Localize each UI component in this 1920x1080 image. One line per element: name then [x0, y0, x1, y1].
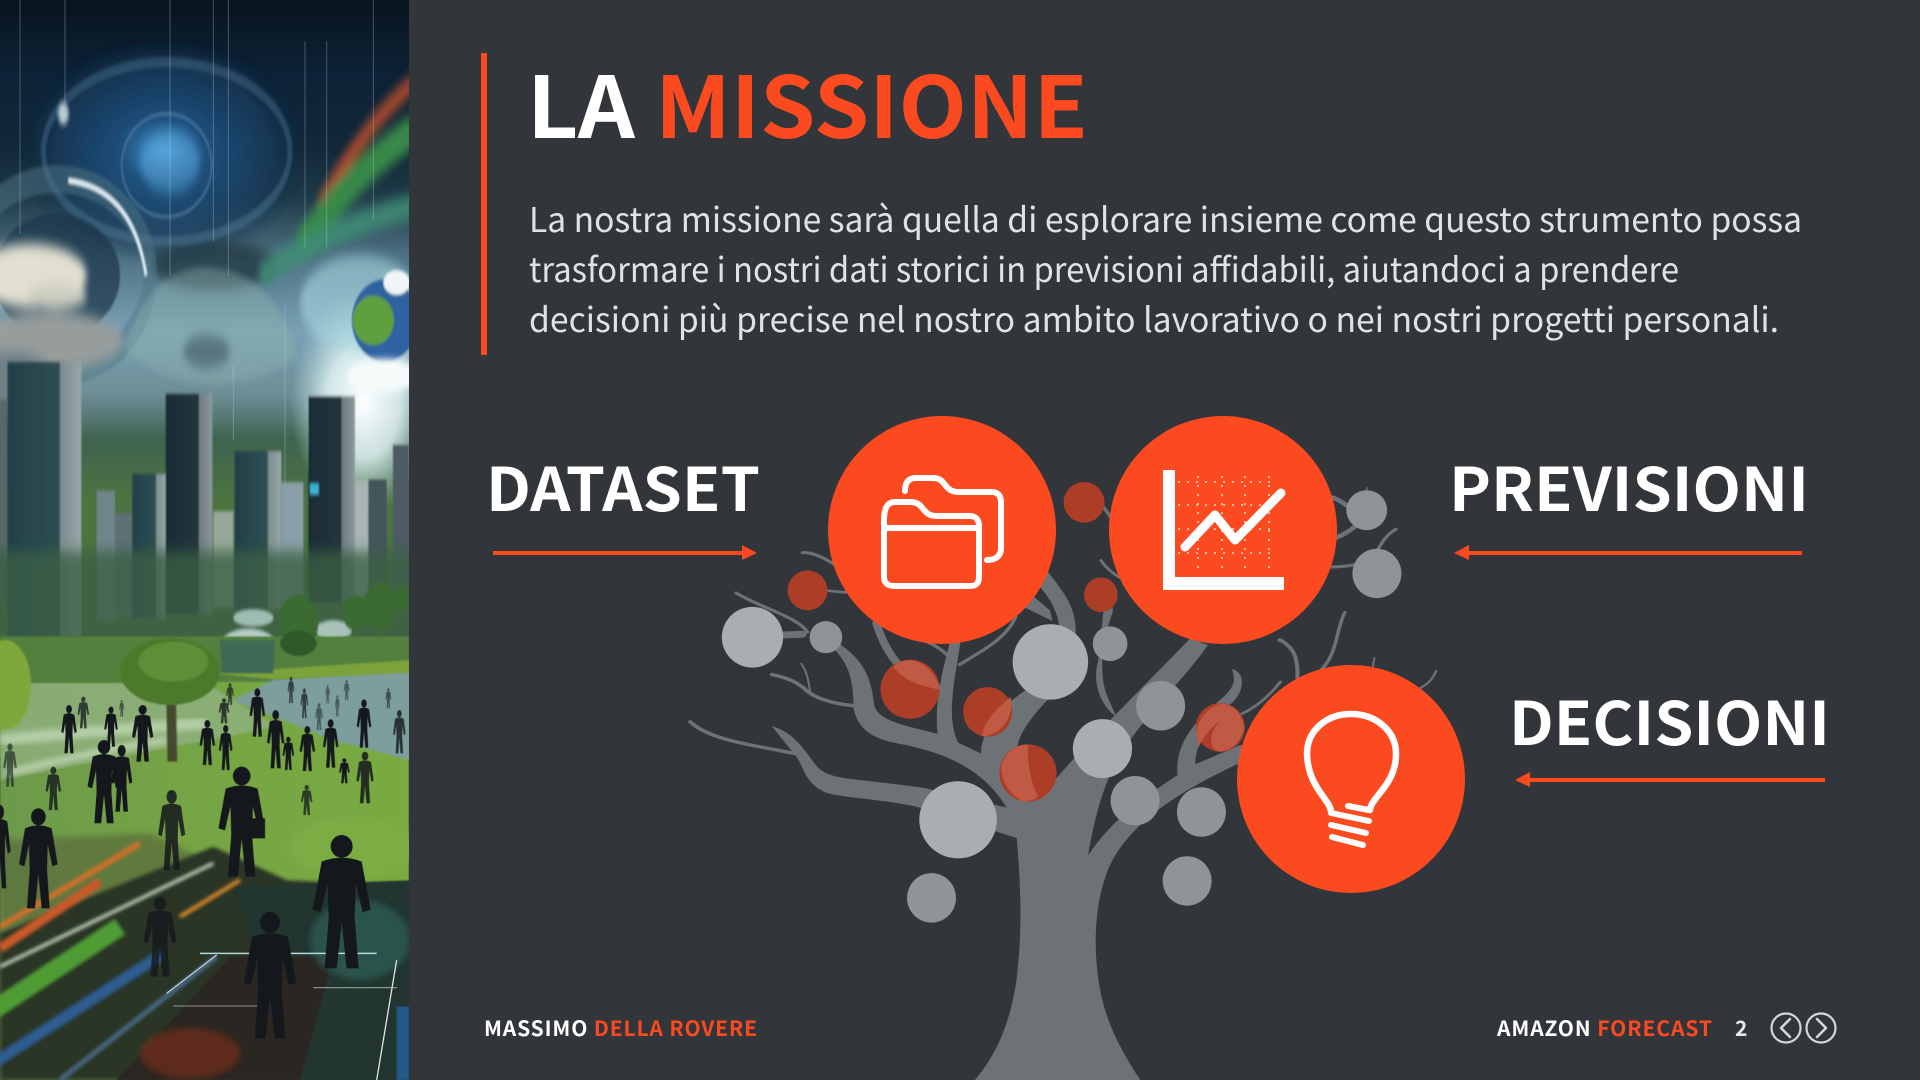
nav icon: next [1806, 1014, 1836, 1042]
clouds [0, 244, 123, 406]
nav icon: previous [1772, 1014, 1800, 1042]
rainbow streaks [260, 83, 413, 276]
icon circle: light bulb [1237, 665, 1465, 893]
title: LA MISSIONE [527, 40, 1088, 163]
bloom and earth [294, 310, 409, 504]
arrow: dataset [493, 545, 757, 560]
arrow: previsioni [1454, 545, 1802, 560]
body text [529, 193, 1802, 342]
dome [123, 267, 298, 384]
body text: La nostra missione sarà quella di esplorare insieme come questo strumento possa [529, 193, 1802, 242]
icon circle: growth chart [1109, 416, 1337, 644]
footer: course name: AMAZON FORECAST [1496, 1013, 1712, 1043]
fruit: mid grey balls [810, 490, 1401, 923]
tree trunk and branches [772, 571, 1246, 1080]
crowd silhouettes [0, 677, 406, 1038]
label: dataset: DATASET [486, 442, 760, 529]
tree illustration [690, 482, 1436, 1080]
icon circle: folders [828, 416, 1056, 644]
distant domes and trees [223, 626, 274, 638]
body text: trasformare i nostri dati storici in previsioni affidabili, aiutandoci a prendere [529, 243, 1679, 292]
skyline [0, 399, 7, 606]
accent bar [481, 53, 487, 355]
footer: author: MASSIMO DELLA ROVERE [484, 1013, 757, 1043]
footer: page number: 2 [1735, 1013, 1747, 1043]
label: previsioni: PREVISIONI [1449, 442, 1809, 529]
red ball branch overlays [893, 660, 1244, 801]
fruit: red balls [788, 482, 1245, 802]
label: decisioni: DECISIONI [1509, 676, 1830, 763]
panel: futuristic city photo [0, 0, 437, 1080]
arrow: decisioni [1515, 772, 1825, 787]
photo: meadow, road and crowd [0, 631, 417, 1080]
photo: sky, rings and skyline [0, 0, 437, 758]
body text: decisioni più precise nel nostro ambito lavorativo o nei nostri progetti personali. [529, 293, 1779, 342]
tree and bush [166, 690, 177, 762]
light streaks [0, 843, 240, 1080]
twigs [690, 488, 1436, 753]
fruit: light balls [722, 607, 1132, 858]
